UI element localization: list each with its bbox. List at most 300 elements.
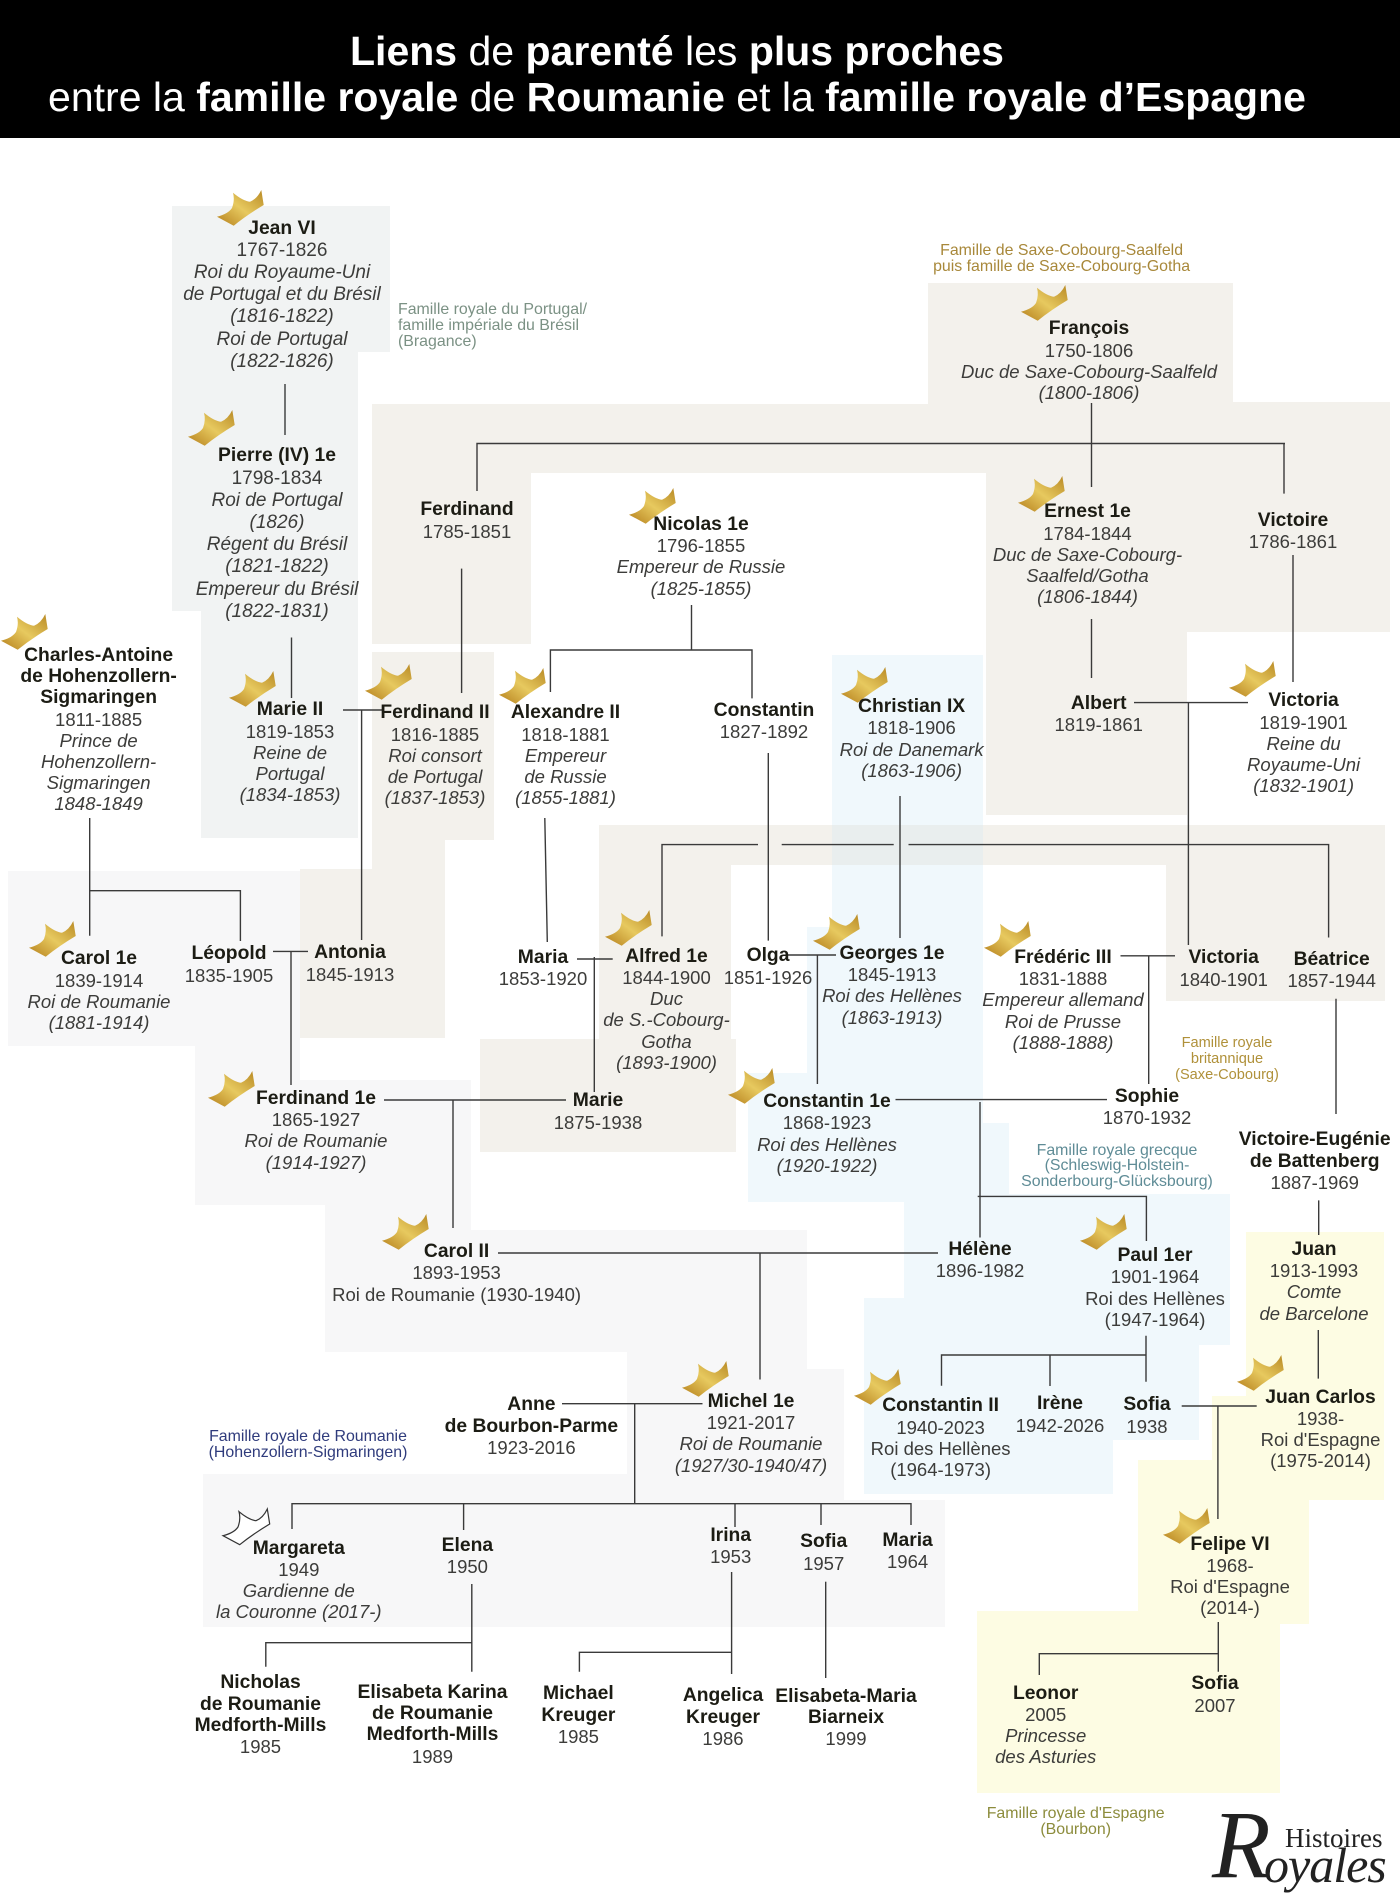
- person: Maria: 1853-1920: [499, 968, 587, 989]
- person: Paul 1er: Roi des Hellènes: [1085, 1288, 1225, 1309]
- person: Nicholas: [195, 1672, 326, 1757]
- family label: grecque: Sonderbourg-Glücksbourg): [1021, 1173, 1213, 1190]
- person: Juan Carlos: 1938-: [1297, 1408, 1344, 1429]
- person: Charles-Antoine: Hohenzollern-: [41, 751, 156, 772]
- family label: britannique: [1175, 1036, 1279, 1083]
- person: Juan Carlos: Roi d'Espagne: [1261, 1429, 1380, 1450]
- person: Victoria, Queen: 1819-1901: [1259, 712, 1348, 733]
- icon: crown Felipe VI: [1163, 1508, 1210, 1544]
- person: Elena: 1950: [447, 1556, 488, 1577]
- icon: crown Jean VI: [217, 190, 264, 226]
- person: Margareta: [216, 1538, 382, 1622]
- person: Georges 1e: Roi des Hellènes: [822, 985, 962, 1006]
- person: Carol 1e: 1839-1914: [55, 970, 143, 991]
- family label: Portugal: [398, 302, 587, 349]
- person: Jean VI: 1767-1826: [237, 240, 327, 261]
- family label: Portugal: Famille royale du Portugal/: [398, 301, 587, 318]
- family label: britannique: Famille royale: [1182, 1035, 1272, 1051]
- person: Anne de Bourbon-Parme: 1923-2016: [487, 1437, 576, 1458]
- person: Antonia: [306, 942, 394, 985]
- person: Elisabeta Karina: de Roumanie: [372, 1703, 493, 1724]
- person: Constantin 1e: [757, 1091, 897, 1176]
- person: Victoria, Empress: Victoria: [1188, 947, 1259, 968]
- connectors: Léopold and Antonia to Ferdinand 1e: [273, 951, 308, 1085]
- family label: Saxe-Cobourg: Famille de Saxe-Cobourg-Saalfeld: [940, 242, 1183, 259]
- panel: Famille royale du Portugal: [172, 206, 390, 838]
- family label: britannique: britannique: [1191, 1051, 1263, 1067]
- person: Paul 1er: Paul 1er: [1117, 1245, 1193, 1266]
- title banner: entre la famille royale de Roumanie et la famille royale d’Espagne: [48, 74, 1306, 120]
- person: Carol 1e: (1881-1914): [49, 1012, 149, 1033]
- person: Constantin II: Roi des Hellènes: [871, 1438, 1011, 1459]
- person: Elisabeta-Maria Biarneix: Elisabeta-Maria: [775, 1686, 917, 1707]
- panel: Famille de Saxe-Cobourg: [300, 283, 1390, 1152]
- person: Alexandre II: de Russie: [524, 766, 607, 787]
- person: Marie II: (1834-1853): [240, 784, 340, 805]
- icon: crown Charles-Antoine: [1, 614, 48, 650]
- person: Sofia, Queen: [1123, 1394, 1171, 1437]
- person: Pierre (IV) 1e: Régent du Brésil: [207, 534, 347, 555]
- person: Marie II: Marie II: [257, 699, 323, 720]
- person: Alfred 1e: Duc: [650, 988, 683, 1009]
- person: Felipe VI: 1968-: [1206, 1555, 1254, 1576]
- connectors: children of Paul 1er: [942, 1336, 1146, 1386]
- person: Ferdinand II: Roi consort: [388, 745, 482, 766]
- title banner: [0, 0, 1400, 138]
- person: Georges 1e: (1863-1913): [842, 1007, 942, 1028]
- person: Marie: Marie: [573, 1090, 623, 1111]
- icon: crown François: [1021, 285, 1068, 321]
- person: Sofia, 1957: Sofia: [800, 1531, 847, 1552]
- icon: crown Victoria: [1229, 661, 1276, 697]
- person: Christian IX: [840, 696, 984, 781]
- person: Alexandre II: Alexandre II: [511, 702, 620, 723]
- person: Carol II: Carol II: [424, 1241, 489, 1262]
- person: Constantin II: Constantin II: [882, 1395, 999, 1416]
- family label: Saxe-Cobourg: [933, 243, 1190, 275]
- person: Ernest 1e: 1784-1844: [1043, 523, 1132, 544]
- person: François: Duc de Saxe-Cobourg-Saalfeld: [961, 361, 1217, 382]
- person: Sofia, 1957: [800, 1531, 847, 1574]
- person: Alexandre II: Empereur: [525, 745, 606, 766]
- person: Sophie: [1103, 1086, 1191, 1128]
- person: Maria, 1964: [882, 1530, 933, 1572]
- person: Carol II: [332, 1241, 581, 1305]
- person: Angelica Kreuger: Kreuger: [686, 1707, 760, 1728]
- person: Olga: [724, 945, 812, 988]
- person: Victoire-Eugénie: Victoire-Eugénie: [1239, 1129, 1391, 1150]
- connectors: Carol II and Hélène to Michel 1e: [498, 1253, 938, 1380]
- person: Angelica Kreuger: 1986: [702, 1728, 744, 1749]
- person: Marie II: Reine de: [253, 742, 327, 763]
- icon: crown Ferdinand 1e: [208, 1071, 255, 1107]
- icon: crown Pierre IV: [188, 410, 235, 446]
- person: Nicolas 1e: [617, 514, 785, 599]
- person: Christian IX: 1818-1906: [867, 717, 956, 738]
- person: Sofia, 2007: 2007: [1194, 1695, 1236, 1716]
- icon: crown Christian IX: [841, 667, 888, 703]
- person: Victoire-Eugénie: [1238, 1129, 1391, 1193]
- family label: Espagne: (Bourbon): [1040, 1821, 1111, 1838]
- person: Pierre (IV) 1e: [196, 445, 359, 622]
- person: Ferdinand: [420, 499, 514, 542]
- family label: Roumanie: Famille royale de Roumanie: [209, 1428, 407, 1445]
- family label: Espagne: Famille royale d'Espagne: [987, 1805, 1165, 1822]
- person: Pierre (IV) 1e: 1798-1834: [232, 468, 322, 488]
- person: Victoria, Empress: 1840-1901: [1179, 969, 1268, 990]
- person: Frédéric III: Roi de Prusse: [1005, 1011, 1121, 1032]
- person: Ferdinand 1e: (1914-1927): [266, 1152, 366, 1173]
- icon: crown Georges 1e: [813, 914, 860, 950]
- icon: crown Carol II: [382, 1214, 429, 1250]
- person: Pierre (IV) 1e: (1826): [250, 512, 304, 533]
- person: Irène: 1942-2026: [1016, 1415, 1104, 1436]
- person: Paul 1er: [1085, 1245, 1225, 1330]
- person: Béatrice: [1287, 949, 1376, 991]
- person: Victoria, Queen: [1247, 690, 1360, 796]
- connectors: Frédéric and Victoria to Sophie: [1120, 956, 1175, 1084]
- person: Carol 1e: Roi de Roumanie: [28, 991, 170, 1012]
- person: Ferdinand 1e: Roi de Roumanie: [245, 1130, 387, 1151]
- person: Charles-Antoine: 1848-1849: [54, 793, 143, 814]
- person: Paul 1er: 1901-1964: [1111, 1266, 1199, 1287]
- person: Marie II: [240, 699, 340, 805]
- person: Marie: [554, 1090, 642, 1133]
- person: Leonor: 2005: [1025, 1704, 1066, 1725]
- person: Pierre (IV) 1e: (1821-1822): [225, 556, 329, 577]
- person: Carol 1e: Carol 1e: [61, 948, 137, 969]
- person: Victoire: 1786-1861: [1249, 531, 1337, 552]
- person: Pierre (IV) 1e: Pierre (IV) 1e: [218, 445, 336, 466]
- person: Leonor: Princesse: [1005, 1725, 1086, 1746]
- person: Jean VI: Roi de Portugal: [217, 329, 347, 350]
- person: Irina: [710, 1525, 751, 1567]
- connectors: Marie II and Ferdinand II to Antonia: [343, 710, 382, 940]
- person: Alfred 1e: Gotha: [641, 1031, 692, 1052]
- person: Constantin II: [871, 1395, 1011, 1480]
- connectors: Portugal line: [285, 384, 292, 698]
- person: Antonia: 1845-1913: [306, 964, 394, 985]
- person: Constantin 1e: Constantin 1e: [763, 1091, 891, 1112]
- person: Hélène: Hélène: [948, 1239, 1012, 1260]
- family label: grecque: (Schleswig-Holstein-: [1045, 1157, 1189, 1174]
- connectors: Béatrice, Victoire-Eugénie, Juan, Juan Carlos: [1318, 999, 1336, 1379]
- person: Georges 1e: 1845-1913: [848, 964, 936, 985]
- connectors: Olga and Georges to Constantin 1e: [788, 955, 836, 1084]
- person: Olga: Olga: [747, 945, 789, 966]
- person: Sophie: 1870-1932: [1103, 1107, 1191, 1128]
- family label: britannique: (Saxe-Cobourg): [1175, 1067, 1279, 1083]
- person: Ferdinand 1e: Ferdinand 1e: [256, 1088, 376, 1109]
- person: Nicolas 1e: 1796-1855: [657, 535, 745, 556]
- icon: crown Nicolas 1e: [629, 488, 676, 524]
- icon: crown Alfred 1e: [605, 910, 652, 946]
- person: Leonor: Leonor: [1013, 1683, 1078, 1704]
- person: Sofia, 1957: 1957: [803, 1553, 844, 1574]
- connectors: Anne and Michel 1e to children: [292, 1404, 911, 1530]
- person: Victoria, Queen: Victoria: [1268, 690, 1339, 711]
- icon: crown Frédéric III: [984, 921, 1031, 957]
- person: Ferdinand: 1785-1851: [423, 521, 511, 542]
- panel: Famille royale d'Espagne: [977, 1232, 1384, 1793]
- person: Irène: Irène: [1037, 1393, 1083, 1414]
- family label: Saxe-Cobourg: puis famille de Saxe-Cobourg-Gotha: [933, 258, 1190, 275]
- person: Marie II: Portugal: [256, 763, 324, 784]
- person: Alfred 1e: (1893-1900): [616, 1052, 717, 1073]
- person: Elisabeta-Maria Biarneix: Biarneix: [808, 1707, 884, 1728]
- person: François: 1750-1806: [1045, 340, 1133, 361]
- person: Jean VI: (1816-1822): [230, 306, 334, 327]
- person: Victoire: [1249, 510, 1337, 552]
- person: Victoria, Empress: [1179, 947, 1268, 990]
- person: Felipe VI: Roi d'Espagne: [1170, 1576, 1290, 1597]
- person: Nicholas: Medforth-Mills: [195, 1715, 326, 1736]
- person: Jean VI: (1822-1826): [230, 351, 334, 372]
- person: Michael Kreuger: Michael: [543, 1683, 614, 1704]
- person: Maria: [499, 947, 587, 989]
- person: Ferdinand: Ferdinand: [420, 499, 514, 520]
- person: Constantin 1e: (1920-1922): [777, 1155, 877, 1176]
- person: Nicolas 1e: Empereur de Russie: [617, 556, 785, 577]
- family label: grecque: Famille royale grecque: [1037, 1142, 1197, 1158]
- connectors: children of Charles-Antoine: [90, 818, 240, 941]
- icon: crown Constantin 1e: [728, 1068, 775, 1104]
- connectors: Constantin to Olga, Christian to Georges: [768, 753, 900, 941]
- person: Georges 1e: [822, 943, 962, 1028]
- person: Hélène: [936, 1239, 1024, 1281]
- person: Anne de Bourbon-Parme: [445, 1394, 618, 1458]
- person: Constantin II: (1964-1973): [890, 1459, 991, 1480]
- connectors: children of François: [477, 403, 1285, 494]
- person: Frédéric III: [982, 947, 1144, 1053]
- family label: Roumanie: (Hohenzollern-Sigmaringen): [209, 1444, 407, 1461]
- person: Ferdinand II: 1816-1885: [391, 724, 479, 745]
- person: Michel 1e: 1921-2017: [707, 1412, 795, 1433]
- person: Anne de Bourbon-Parme: Anne: [507, 1394, 555, 1415]
- person: François: [961, 318, 1218, 403]
- person: Antonia: Antonia: [314, 942, 386, 963]
- person: Charles-Antoine: [20, 645, 177, 814]
- person: Michel 1e: [675, 1391, 827, 1476]
- person: Juan: de Barcelone: [1259, 1303, 1369, 1324]
- person: Pierre (IV) 1e: Empereur du Brésil: [196, 579, 358, 600]
- person: Constantin: Constantin: [714, 700, 814, 721]
- person: Ferdinand II: Ferdinand II: [380, 702, 490, 723]
- person: Frédéric III: Frédéric III: [1014, 947, 1112, 968]
- person: Victoria, Queen: (1832-1901): [1253, 775, 1354, 796]
- person: Pierre (IV) 1e: Roi de Portugal: [212, 490, 342, 511]
- person: Alfred 1e: 1844-1900: [622, 967, 711, 988]
- person: Georges 1e: Georges 1e: [839, 943, 945, 964]
- person: Jean VI: de Portugal et du Brésil: [183, 284, 381, 305]
- person: Felipe VI: Felipe VI: [1190, 1534, 1270, 1555]
- connectors: Sofia and Juan Carlos to Felipe VI: [1182, 1406, 1257, 1519]
- person: François: François: [1049, 318, 1129, 339]
- person: Léopold: Léopold: [192, 943, 266, 964]
- person: Ernest 1e: Duc de Saxe-Cobourg-: [993, 544, 1182, 565]
- person: Juan Carlos: (1975-2014): [1270, 1450, 1371, 1471]
- connectors: children of Elena: [266, 1584, 472, 1672]
- person: Alfred 1e: Alfred 1e: [625, 946, 708, 967]
- person: Léopold: 1835-1905: [185, 965, 273, 986]
- person: Juan: Juan: [1291, 1239, 1336, 1260]
- person: Ferdinand 1e: 1865-1927: [272, 1109, 360, 1130]
- person: Charles-Antoine: Sigmaringen: [40, 687, 157, 708]
- person: Constantin: 1827-1892: [720, 721, 808, 742]
- family label: Portugal: (Bragance): [398, 333, 477, 350]
- person: Nicholas: de Roumanie: [200, 1694, 321, 1715]
- person: Leonor: [995, 1683, 1096, 1768]
- person: Nicolas 1e: Nicolas 1e: [653, 514, 749, 535]
- person: Elena: Elena: [442, 1535, 493, 1556]
- person: Juan: Comte: [1287, 1281, 1341, 1302]
- person: Frédéric III: (1888-1888): [1013, 1032, 1113, 1053]
- person: Maria, 1964: Maria: [882, 1530, 933, 1551]
- icon: crown Ernest 1e: [1018, 476, 1065, 512]
- person: Elisabeta Karina: 1989: [412, 1746, 453, 1767]
- person: Michael Kreuger: Kreuger: [541, 1705, 615, 1726]
- icon: crown Paul 1er: [1080, 1214, 1127, 1250]
- person: Constantin: [714, 700, 814, 742]
- connectors: children of Nicolas 1e: [550, 605, 752, 698]
- person: Charles-Antoine: Prince de: [60, 730, 138, 751]
- person: Angelica Kreuger: [683, 1685, 763, 1749]
- person: Ernest 1e: (1806-1844): [1037, 586, 1138, 607]
- person: Constantin 1e: 1868-1923: [783, 1112, 871, 1133]
- person: Michael Kreuger: [541, 1683, 615, 1747]
- person: Michel 1e: Michel 1e: [708, 1391, 794, 1412]
- person: Michel 1e: (1927/30-1940/47): [675, 1454, 827, 1476]
- person: Margareta: Margareta: [253, 1538, 345, 1559]
- icon: crown Constantin II: [854, 1369, 901, 1405]
- person: Ferdinand II: de Portugal: [388, 766, 482, 787]
- icon: crown Juan Carlos: [1237, 1355, 1284, 1391]
- person: Albert: Albert: [1071, 693, 1127, 714]
- logo: Histoires Royales: Histoires: [1285, 1823, 1382, 1853]
- panel: overlap of Greek and Saxe-Coburg bands: [832, 825, 983, 865]
- person: Charles-Antoine: de Hohenzollern-: [20, 666, 177, 687]
- person: Elisabeta-Maria Biarneix: 1999: [825, 1728, 867, 1749]
- person: Constantin 1e: Roi des Hellènes: [757, 1134, 897, 1155]
- logo: Histoires Royales: oyales: [1264, 1837, 1386, 1893]
- person: Frédéric III: 1831-1888: [1019, 968, 1107, 989]
- person: Angelica Kreuger: Angelica: [683, 1685, 763, 1706]
- person: Carol II: 1893-1953: [412, 1262, 501, 1283]
- icon: crown Marie II: [229, 671, 276, 707]
- person: Juan: [1259, 1239, 1369, 1324]
- person: Maria: Maria: [518, 947, 568, 968]
- connectors: children of Albert and Victoria: [662, 845, 1329, 938]
- person: Alfred 1e: [603, 946, 730, 1073]
- person: Margareta: la Couronne (2017-): [216, 1601, 382, 1622]
- person: François: (1800-1806): [1039, 382, 1139, 403]
- person: Ferdinand 1e: [245, 1088, 387, 1173]
- person: Alfred 1e: de S.-Cobourg-: [603, 1009, 730, 1030]
- person: Ferdinand II: (1837-1853): [385, 787, 485, 808]
- person: Leonor: des Asturies: [995, 1746, 1096, 1767]
- person: Elisabeta Karina: [357, 1682, 508, 1767]
- person: Maria, 1964: 1964: [887, 1551, 928, 1572]
- person: Christian IX: (1863-1906): [861, 760, 962, 781]
- person: Marie: 1875-1938: [554, 1112, 642, 1133]
- person: Ernest 1e: Saalfeld/Gotha: [1026, 565, 1149, 586]
- person: Ferdinand II: [380, 702, 490, 808]
- person: Ernest 1e: Ernest 1e: [1044, 501, 1131, 522]
- person: Sophie: Sophie: [1115, 1086, 1179, 1107]
- person: Felipe VI: (2014-): [1200, 1597, 1260, 1618]
- family label: Portugal: famille impériale du Brésil: [398, 317, 579, 334]
- person: Charles-Antoine: Sigmaringen: [47, 772, 151, 793]
- person: Marie II: 1819-1853: [246, 721, 334, 742]
- person: Elena: [442, 1535, 493, 1577]
- person: Michael Kreuger: 1985: [558, 1726, 599, 1747]
- family label: Espagne: [987, 1806, 1165, 1838]
- person: Béatrice: 1857-1944: [1287, 970, 1376, 991]
- person: Albert: 1819-1861: [1054, 714, 1143, 735]
- person: Alexandre II: [511, 702, 620, 808]
- person: Charles-Antoine: 1811-1885: [55, 709, 142, 730]
- person: Juan: 1913-1993: [1270, 1260, 1358, 1281]
- connectors: children of Irina: [579, 1572, 732, 1674]
- icon: crown Michel 1e: [682, 1361, 729, 1397]
- logo: Histoires Royales: [1212, 1808, 1392, 1894]
- person: Jean VI: Roi du Royaume-Uni: [194, 262, 370, 283]
- person: Felipe VI: [1170, 1534, 1290, 1618]
- person: Margareta: Gardienne de: [243, 1580, 355, 1601]
- person: Charles-Antoine: Charles-Antoine: [24, 645, 173, 666]
- person: Carol II: Roi de Roumanie (1930-1940): [332, 1284, 581, 1305]
- connectors: Constantin 1e and Sophie to children: [896, 1100, 1146, 1241]
- icon: crown Alexandre II: [499, 668, 546, 704]
- person: Nicholas: Nicholas: [220, 1672, 301, 1693]
- title banner: Liens de parenté les plus proches: [350, 28, 1004, 74]
- connectors: children of Felipe VI: [1039, 1622, 1218, 1675]
- family label: grecque: [1021, 1142, 1213, 1190]
- icon: crown Ferdinand II: [365, 664, 412, 700]
- person: Irina: Irina: [710, 1525, 751, 1546]
- icon: outline crown Margareta: [223, 1509, 270, 1545]
- person: Léopold: [185, 943, 273, 986]
- person: Alexandre II: (1855-1881): [515, 787, 616, 808]
- connectors: Alexandre II to Maria; Maria and Alfred to Marie: [545, 818, 613, 1092]
- person: Irina: 1953: [710, 1546, 751, 1567]
- person: Paul 1er: (1947-1964): [1105, 1309, 1205, 1330]
- person: Olga: 1851-1926: [724, 967, 812, 988]
- person: Hélène: 1896-1982: [936, 1260, 1024, 1281]
- connector: Sofia to Elisabeta-Maria: [825, 1582, 827, 1678]
- person: Margareta: 1949: [278, 1559, 319, 1580]
- person: Jean VI: [183, 218, 382, 372]
- person: Elisabeta Karina: Elisabeta Karina: [357, 1682, 508, 1703]
- person: Victoria, Queen: Reine du: [1267, 733, 1341, 754]
- person: Victoire-Eugénie: 1887-1969: [1270, 1172, 1359, 1193]
- person: Constantin II: 1940-2023: [896, 1417, 985, 1438]
- person: Albert: [1054, 693, 1143, 735]
- person: Sofia, Queen: Sofia: [1123, 1394, 1171, 1415]
- person: Victoire-Eugénie: de Battenberg: [1250, 1151, 1380, 1172]
- person: Elisabeta Karina: Medforth-Mills: [367, 1724, 498, 1745]
- connectors: Ferdinand 1e and Marie to Carol II: [384, 1100, 566, 1228]
- person: Sofia, Queen: 1938: [1126, 1416, 1168, 1437]
- panel: Famille royale de Roumanie: [8, 871, 945, 1627]
- person: Nicolas 1e: (1825-1855): [651, 578, 751, 599]
- person: Jean VI: Jean VI: [248, 218, 316, 238]
- person: Victoire: Victoire: [1258, 510, 1328, 531]
- person: Sofia, 2007: [1191, 1673, 1239, 1716]
- person: Victoria, Queen: Royaume-Uni: [1247, 754, 1360, 775]
- person: Irène: [1016, 1393, 1104, 1436]
- person: Elisabeta-Maria Biarneix: [775, 1686, 917, 1750]
